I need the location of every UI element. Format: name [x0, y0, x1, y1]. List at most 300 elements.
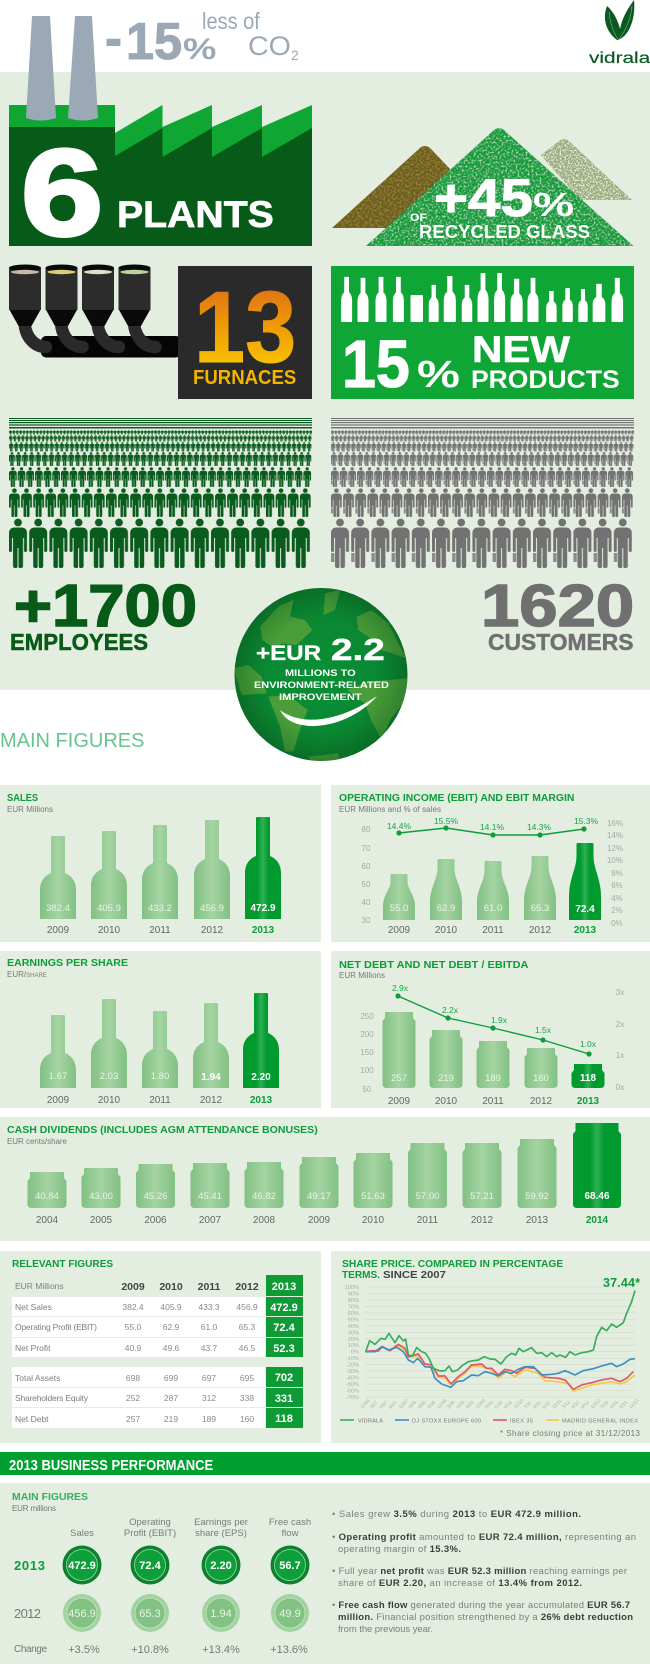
legend: VIDRALA: [358, 1418, 383, 1424]
chart: axes: 250: [360, 1012, 374, 1021]
axis: date ticks: 9/13: [618, 1400, 629, 1410]
panel: factory 6 plants: [9, 16, 312, 261]
circles 2012: 49.9: [279, 1608, 301, 1620]
text block: bullets: • Operating profit amounted to EUR 72.4 million, representing an: [332, 1532, 636, 1543]
panel: 2013 business performance: EUR millions: [12, 1504, 56, 1513]
panel: share price: SINCE 2007: [383, 1270, 446, 1281]
panel: cash dividends: EUR cents/share: [7, 1137, 68, 1146]
axis: date ticks: 12/12: [590, 1398, 602, 1410]
line chart: share price: 50%: [348, 1317, 359, 1323]
axis: date ticks: 3/08: [407, 1400, 417, 1410]
chart: axes: 2x: [616, 1020, 624, 1029]
line chart: net debt / ebitda: 1.0x: [580, 1039, 597, 1049]
axis: date ticks: 6/09: [455, 1400, 465, 1410]
panel: EBIT: [331, 785, 650, 942]
chart: axes: 100: [360, 1066, 374, 1075]
table: 46.5: [239, 1343, 256, 1353]
line chart: share price: [345, 1285, 640, 1410]
bar chart: milk bottles: 72.4: [575, 904, 595, 915]
column headers: Earnings per: [194, 1517, 248, 1528]
bar chart: jars: 2010: [362, 1215, 385, 1226]
panel: net debt: NET DEBT AND NET DEBT / EBITDA: [339, 959, 529, 971]
table: 699: [164, 1373, 178, 1383]
bar chart: bottles: 1.80: [151, 1071, 169, 1082]
line chart: share price: -70%: [346, 1395, 359, 1401]
bar chart: jars: 2005: [90, 1215, 113, 1226]
CO2 callout: 2: [291, 47, 299, 63]
bar chart: jars: 51.63: [361, 1191, 385, 1202]
panel: share price: TERMS.: [342, 1270, 380, 1281]
panel: 2013 business performance: MAIN FIGURES: [12, 1492, 88, 1503]
legend: MADRID GENERAL INDEX: [562, 1418, 638, 1424]
line chart: net debt / ebitda: [392, 983, 597, 1057]
row labels: 2013: [14, 1558, 45, 1573]
chart: axes: 10%: [607, 856, 623, 865]
column headers: flow: [282, 1528, 299, 1539]
axis: date ticks: 3/13: [599, 1400, 609, 1410]
panel: net debt: EUR Millions: [339, 971, 385, 980]
axis: date ticks: 12/08: [436, 1398, 448, 1410]
circles 2012: 1.94: [210, 1608, 232, 1620]
chart: axes: 70: [362, 844, 371, 853]
bar chart: bottles: 2010: [98, 925, 121, 936]
bar chart: jars: [28, 1123, 621, 1226]
panel: new products: NEW: [472, 329, 571, 370]
table: 472.9: [270, 1302, 298, 1314]
axis: date ticks: 6/08: [417, 1400, 427, 1410]
table: 219: [164, 1414, 178, 1424]
line chart: net debt / ebitda: 2.9x: [392, 983, 409, 993]
bar chart: jars: 46.82: [252, 1191, 276, 1202]
table: 55.0: [125, 1322, 142, 1332]
bar chart: jars: 2012: [530, 1096, 553, 1107]
chart: axes: 2%: [611, 906, 623, 915]
bar chart: jars: 59.92: [525, 1191, 549, 1202]
column headers: Operating: [129, 1517, 171, 1528]
table: 2012: [235, 1281, 259, 1293]
axis: date ticks: 3/07: [369, 1400, 379, 1410]
panel: EBIT: OPERATING INCOME (EBIT) AND EBIT MARGIN: [339, 793, 574, 804]
bar chart: jars: 2014: [586, 1215, 609, 1226]
bar chart: bottles: 2.20: [251, 1072, 271, 1083]
line chart: share price: -60%: [346, 1388, 359, 1394]
chart: axes: 3x: [616, 988, 624, 997]
chart: axes: 50: [363, 1085, 372, 1094]
chart: axes: 1x: [616, 1051, 624, 1060]
chart: axes: 6%: [611, 881, 623, 890]
axis: date ticks: 6/12: [570, 1400, 581, 1410]
axis: date ticks: 9/07: [388, 1400, 398, 1410]
CO2 callout: CO: [248, 31, 291, 61]
panel: EBIT: EUR Millions and % of sales: [339, 805, 441, 814]
table: 118: [275, 1413, 293, 1425]
footnote: * Share closing price at 31/12/2013: [500, 1429, 641, 1438]
bar chart: milk bottles: 61.0: [484, 903, 502, 914]
panel: new products: %: [417, 354, 460, 396]
line chart: share price: -30%: [346, 1369, 359, 1375]
table: 698: [126, 1373, 140, 1383]
globe callout: 2.2: [331, 633, 385, 667]
bar chart: jars: 118: [580, 1073, 597, 1084]
bar chart: jars: 2011: [482, 1096, 504, 1107]
bar chart: milk bottles: 2010: [435, 925, 458, 936]
bar chart: jars: 45.41: [198, 1191, 222, 1202]
panel: net debt: [331, 951, 650, 1108]
bar chart: bottles: 2011: [149, 1095, 171, 1106]
panel: relevant figures: RELEVANT FIGURES: [12, 1259, 113, 1270]
change row: +13.6%: [270, 1644, 308, 1656]
CO2 callout: 15: [126, 12, 182, 70]
axis: date ticks: 3/11: [522, 1400, 532, 1410]
bar chart: jars: 2006: [144, 1215, 167, 1226]
column headers: Free cash: [269, 1517, 311, 1528]
panel: customers: [331, 418, 634, 655]
globe callout: +EUR: [256, 641, 321, 665]
axis: date ticks: 6/13: [609, 1400, 619, 1410]
axis: date ticks: 9/12: [580, 1400, 590, 1410]
CO2 callout: -: [105, 9, 122, 67]
text block: bullets: operating margin of 15.3%.: [338, 1544, 461, 1555]
table: 189: [202, 1414, 216, 1424]
axis: date ticks: 12/07: [398, 1398, 410, 1410]
table: 65.3: [239, 1322, 256, 1332]
panel: recycled glass piles: %: [533, 186, 574, 223]
bar chart: jars: 43.00: [89, 1191, 113, 1202]
panel: new products: 15: [342, 326, 410, 402]
circles 2013: 56.7: [279, 1560, 301, 1572]
line chart: share price: -20%: [346, 1363, 359, 1369]
table: Net Sales: [15, 1302, 52, 1312]
table: 40.9: [125, 1343, 142, 1353]
table: 43.7: [201, 1343, 218, 1353]
axis: date ticks: 9/08: [426, 1400, 437, 1410]
panel: earnings per share: EUR/SHARE: [7, 970, 47, 979]
text block: bullets: • Free cash flow generated during the year accumulated EUR 56.7: [332, 1600, 630, 1611]
icon: rows of people green: [9, 418, 312, 568]
table: 49.6: [163, 1343, 180, 1353]
line chart: margin: [387, 816, 598, 838]
text block: bullets: share of EUR 2.20, an increase of 13.4% from 2012.: [338, 1578, 582, 1589]
line chart: net debt / ebitda: 1.9x: [491, 1015, 508, 1025]
table: 2010: [159, 1281, 183, 1293]
panel: cash dividends: CASH DIVIDENDS (INCLUDES AGM ATTENDANCE BONUSES): [7, 1125, 318, 1136]
bar chart: milk bottles: 2009: [388, 925, 411, 936]
table: 697: [202, 1373, 216, 1383]
bar chart: jars: 2007: [199, 1215, 222, 1226]
bar chart: bottles: 2.03: [100, 1071, 118, 1082]
CO2 callout: [105, 8, 299, 70]
chart: axes: 50: [362, 880, 371, 889]
table: 338: [240, 1393, 254, 1403]
circles 2013: 72.4: [139, 1560, 162, 1572]
bar chart: jars: 45.26: [144, 1191, 167, 1202]
axis: date ticks: 12/11: [551, 1398, 563, 1410]
bar chart: bottles: 2012: [201, 925, 224, 936]
chart: axes: 0%: [611, 919, 623, 928]
bar chart: jars: 160: [533, 1073, 549, 1084]
table: 405.9: [160, 1302, 182, 1312]
bar chart: jars: 68.46: [584, 1191, 610, 1202]
axis: date ticks: 3/09: [446, 1400, 456, 1410]
line chart: share price: 40%: [348, 1324, 359, 1330]
bar chart: jars: 189: [485, 1073, 501, 1084]
axis: date ticks: 3/10: [484, 1400, 494, 1410]
column headers: Sales: [70, 1528, 94, 1539]
bar chart: jars: [382, 1012, 604, 1107]
bar chart: milk bottles: 55.0: [390, 903, 408, 914]
table: 252: [126, 1393, 140, 1403]
chart: axes: 60: [362, 862, 371, 871]
panel: sales: [0, 785, 321, 942]
text block: bullets: • Full year net profit was EUR 52.3 million reaching earnings per: [332, 1566, 627, 1577]
chart: axes: 0x: [616, 1083, 624, 1092]
globe callout: MILLIONS TO: [285, 669, 356, 679]
panel: recycled glass piles: [332, 128, 634, 246]
table: 382.4: [122, 1302, 144, 1312]
logo: vidrala: [589, 0, 650, 66]
bar chart: bottles: 2013: [252, 925, 275, 936]
line chart: net debt / ebitda: 2.2x: [442, 1005, 459, 1015]
line chart: margin: 14.1%: [480, 822, 504, 832]
bar chart: milk bottles: 2012: [529, 925, 552, 936]
column headers: [70, 1517, 311, 1539]
legend: IBEX 35: [510, 1418, 533, 1424]
line chart: margin: 15.3%: [574, 816, 598, 826]
line chart: share price: -40%: [346, 1376, 359, 1382]
line chart: share price: 90%: [348, 1292, 359, 1298]
line chart: share price: 20%: [348, 1337, 359, 1343]
bar chart: bottles: 2010: [98, 1095, 121, 1106]
table: 72.4: [273, 1322, 296, 1334]
bar chart: jars: 49.17: [307, 1191, 331, 1202]
change row: +10.8%: [131, 1644, 169, 1656]
table: 287: [164, 1393, 178, 1403]
table: 2013: [272, 1281, 296, 1293]
axis: date ticks: 6/10: [494, 1400, 504, 1410]
table: 702: [275, 1372, 293, 1384]
axis: date ticks: 12/10: [513, 1398, 525, 1410]
bar chart: jars: 2009: [308, 1215, 331, 1226]
circles 2013: [62, 1546, 310, 1584]
text block: bullets: [332, 1509, 636, 1635]
table: 2009: [121, 1281, 145, 1293]
table: Total Assets: [15, 1373, 60, 1383]
table: Net Debt: [15, 1414, 49, 1424]
globe callout: IMPROVEMENT: [279, 693, 362, 703]
CO2 callout: less of: [202, 8, 261, 34]
bar chart: bottles: 2009: [47, 925, 70, 936]
panel: 2013 business performance: [0, 1483, 650, 1664]
axis: date ticks: 12/06: [359, 1398, 371, 1410]
table: Net Profit: [15, 1343, 51, 1353]
chart: axes: 80: [362, 825, 371, 834]
panel: factory 6 plants: PLANTS: [117, 194, 274, 236]
change row: +3.5%: [68, 1644, 100, 1656]
chart: axes: 16%: [607, 819, 623, 828]
axis: date ticks: [359, 1398, 640, 1410]
bar chart: bottles: 456.9: [200, 903, 224, 914]
axis: date ticks: 3/12: [561, 1400, 571, 1410]
panel: employees: [9, 418, 312, 655]
column headers: share (EPS): [195, 1528, 247, 1539]
bar chart: jars: 2012: [471, 1215, 494, 1226]
axis: date ticks: 12/13: [628, 1398, 640, 1410]
circles 2013: 2.20: [210, 1560, 232, 1572]
legend: [340, 1418, 638, 1424]
line chart: margin: 14.4%: [387, 821, 411, 831]
bar chart: jars: 2011: [417, 1215, 439, 1226]
bar chart: jars: 2010: [435, 1096, 458, 1107]
table: [12, 1275, 303, 1428]
table: 433.3: [198, 1302, 220, 1312]
axis: date ticks: 6/11: [532, 1400, 542, 1410]
bar chart: jars: 2004: [36, 1215, 59, 1226]
change row: +13.4%: [202, 1644, 240, 1656]
line chart: share price: 10%: [348, 1343, 359, 1349]
chart: axes: 14%: [607, 831, 623, 840]
section banner: 2013 BUSINESS PERFORMANCE: [9, 1456, 213, 1473]
panel: cash dividends: [0, 1117, 650, 1241]
table: 2011: [198, 1281, 221, 1293]
circles 2012: 65.3: [139, 1608, 161, 1620]
panel: customers: 1620: [481, 573, 634, 639]
line chart: margin: 15.5%: [434, 816, 458, 826]
axis: date ticks: 9/11: [542, 1400, 552, 1410]
CO2 callout: %: [183, 32, 216, 66]
chart: axes: 200: [360, 1030, 374, 1039]
bar chart: jars: 257: [391, 1073, 407, 1084]
legend: DJ STOXX EUROPE 600: [412, 1418, 481, 1424]
bar chart: milk bottles: 62.9: [437, 903, 455, 914]
logo: vidrala: vidrala: [589, 48, 650, 66]
chart: axes: [362, 819, 623, 928]
panel: recycled glass piles: +45: [434, 168, 533, 227]
bar chart: jars: 2008: [253, 1215, 276, 1226]
bar chart: bottles: [40, 993, 279, 1106]
icon: bottles: [341, 273, 623, 322]
axis: date ticks: 12/09: [474, 1398, 486, 1410]
section banner: [0, 1452, 650, 1475]
panel: sales: EUR Millions: [7, 805, 53, 814]
bar chart: jars: 2009: [388, 1096, 411, 1107]
panel: employees: EMPLOYEES: [10, 630, 148, 655]
line chart: net debt / ebitda: 1.5x: [535, 1025, 552, 1035]
bar chart: jars: 40.84: [35, 1191, 59, 1202]
background band: [0, 72, 650, 690]
line chart: share price: 0%: [351, 1350, 359, 1356]
heading: main figures: MAIN FIGURES: [0, 730, 144, 752]
table: 312: [202, 1393, 216, 1403]
panel: earnings per share: EARNINGS PER SHARE: [7, 958, 128, 969]
chart: axes: 8%: [611, 869, 623, 878]
panel: furnaces: 13: [194, 272, 296, 384]
table: 160: [240, 1414, 254, 1424]
table: Operating Profit (EBIT): [15, 1322, 97, 1332]
panel: recycled glass piles: RECYCLED GLASS: [419, 221, 590, 242]
bar chart: bottles: 2009: [47, 1095, 70, 1106]
panel: share price: [331, 1251, 650, 1443]
panel: new products: PRODUCTS: [471, 367, 620, 394]
panel: share price: 37.44*: [603, 1276, 640, 1290]
axis: date ticks: 6/07: [378, 1400, 389, 1410]
table: EUR Millions: [15, 1281, 64, 1291]
table: Shareholders Equity: [15, 1393, 89, 1403]
panel: furnaces: [9, 264, 312, 399]
bar chart: bottles: 1.67: [49, 1071, 67, 1082]
change row: [68, 1644, 308, 1656]
circles 2012: [63, 1594, 309, 1632]
circles 2012: 456.9: [68, 1608, 96, 1620]
chart: axes: 150: [360, 1048, 374, 1057]
icon: rows of people grey: [331, 418, 634, 568]
icon: chimneys: [26, 16, 98, 120]
icon: smile: [280, 696, 377, 726]
panel: relevant figures: [0, 1251, 321, 1443]
axis: date ticks: 9/09: [465, 1400, 475, 1410]
bar chart: bottles: [40, 817, 281, 936]
bar chart: jars: 57.00: [416, 1191, 439, 1202]
table: 331: [275, 1393, 293, 1405]
circles 2013: 472.9: [68, 1560, 96, 1572]
bar chart: jars: 2013: [526, 1215, 549, 1226]
table: 62.9: [163, 1322, 180, 1332]
bar chart: bottles: 433.2: [148, 903, 172, 914]
panel: customers: CUSTOMERS: [488, 629, 633, 655]
panel: furnaces: FURNACES: [193, 367, 296, 389]
bar chart: bottles: 2013: [250, 1095, 273, 1106]
table: 695: [240, 1373, 254, 1383]
bar chart: bottles: 382.4: [46, 903, 70, 914]
panel: sales: SALES: [7, 793, 39, 804]
line chart: share price: 70%: [348, 1304, 359, 1310]
line chart: share price: 80%: [348, 1298, 359, 1304]
axis: date ticks: 9/10: [503, 1400, 513, 1410]
chart: axes: 12%: [607, 844, 623, 853]
text block: bullets: million. Financial position strengthened by a 26% debt reduction: [338, 1612, 633, 1623]
chart: axes: 4%: [611, 894, 623, 903]
bar chart: jars: 57.21: [470, 1191, 494, 1202]
bar chart: milk bottles: [383, 843, 601, 936]
row labels: 2012: [14, 1606, 41, 1621]
bar chart: milk bottles: 2011: [482, 925, 504, 936]
line chart: margin: 14.3%: [527, 822, 551, 832]
bar chart: bottles: 2011: [149, 925, 171, 936]
chart: axes: [360, 988, 624, 1094]
bar chart: bottles: 2012: [200, 1095, 223, 1106]
line chart: share price: 60%: [348, 1311, 359, 1317]
panel: new products: [331, 266, 634, 402]
bar chart: bottles: 405.9: [97, 903, 121, 914]
chart: axes: 30: [362, 916, 371, 925]
text block: bullets: • Sales grew 3.5% during 2013 to EUR 472.9 million.: [332, 1509, 581, 1520]
globe callout: ENVIRONMENT-RELATED: [254, 681, 389, 691]
table: 456.9: [236, 1302, 258, 1312]
line chart: share price: 100%: [345, 1285, 359, 1291]
row labels: Change: [14, 1644, 47, 1655]
line chart: share price: -10%: [346, 1356, 359, 1362]
bar chart: milk bottles: 65.3: [531, 903, 549, 914]
bar chart: milk bottles: 2013: [574, 925, 597, 936]
bar chart: bottles: 472.9: [250, 903, 276, 914]
bar chart: jars: 219: [438, 1073, 454, 1084]
panel: employees: +1700: [14, 574, 197, 639]
line chart: share price: 30%: [348, 1330, 359, 1336]
row labels: [14, 1558, 47, 1655]
text block: bullets: from the previous year.: [338, 1624, 433, 1635]
bar chart: bottles: 1.94: [201, 1072, 221, 1083]
globe callout: [233, 588, 408, 763]
icon: pipe and crucibles: [9, 264, 181, 358]
